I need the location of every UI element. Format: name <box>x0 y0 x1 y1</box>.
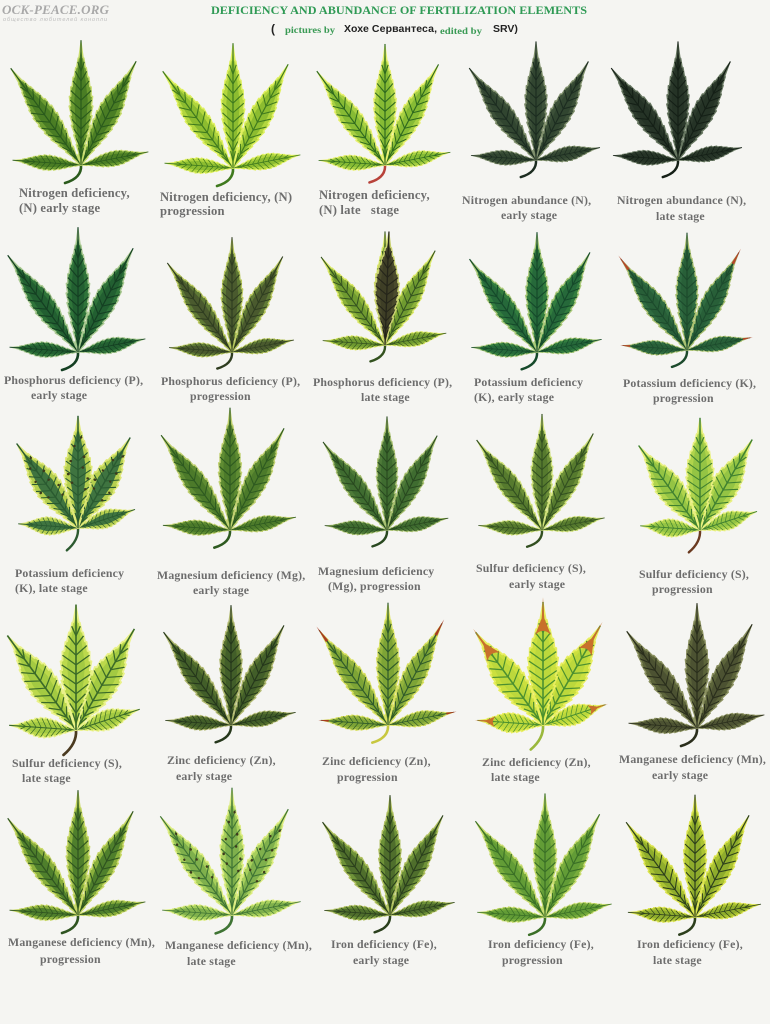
caption: (N) late stage <box>319 203 399 217</box>
icon: leaf <box>308 44 452 182</box>
panel: potassium deficiency progression <box>612 233 756 405</box>
icon: leaf <box>627 418 764 552</box>
caption: Iron deficiency (Fe), <box>331 937 437 951</box>
icon: leaf <box>0 605 148 755</box>
icon: leaf <box>0 790 147 933</box>
caption: progression <box>337 770 398 784</box>
caption: progression <box>652 582 713 596</box>
caption: late stage <box>656 209 705 223</box>
caption: early stage <box>31 388 87 402</box>
caption: Iron deficiency (Fe), <box>637 937 743 951</box>
panel: potassium deficiency late <box>5 416 142 595</box>
caption: Sulfur deficiency (S), <box>12 756 122 770</box>
icon: leaf <box>310 603 457 743</box>
caption: early stage <box>176 769 232 783</box>
subtitle credits <box>271 22 518 37</box>
panel: zinc deficiency late <box>463 597 613 784</box>
caption: Zinc deficiency (Zn), <box>322 754 431 768</box>
caption: early stage <box>353 953 409 967</box>
panel: iron deficiency early <box>314 795 456 967</box>
panel: nitrogen abundance late <box>602 41 746 223</box>
subtitle credits: SRV) <box>493 23 518 35</box>
icon: leaf <box>159 237 295 369</box>
icon: leaf <box>463 597 613 749</box>
icon: leaf <box>617 603 766 746</box>
icon: leaf <box>151 788 302 933</box>
panel: zinc deficiency early <box>155 605 297 783</box>
icon: leaf <box>468 414 606 547</box>
icon: leaf <box>1 40 150 183</box>
icon: leaf <box>314 416 450 546</box>
caption: Potassium deficiency (K), <box>623 376 756 390</box>
caption: early stage <box>652 768 708 782</box>
panel: phosphorus deficiency late <box>312 231 452 404</box>
caption: early stage <box>193 583 249 597</box>
panel: nitrogen deficiency progression <box>153 43 302 218</box>
subtitle credits: ( <box>271 22 275 36</box>
panel: potassium deficiency early <box>461 232 603 404</box>
caption: Iron deficiency (Fe), <box>488 937 594 951</box>
caption: Nitrogen deficiency, (N) <box>160 190 292 204</box>
icon: leaf <box>155 605 297 742</box>
panel: sulfur deficiency late <box>0 605 148 785</box>
icon: leaf <box>617 795 763 935</box>
subtitle credits: pictures by <box>285 26 335 36</box>
caption: Potassium deficiency <box>15 566 124 580</box>
caption: (K), late stage <box>15 581 88 595</box>
caption: late stage <box>653 953 702 967</box>
caption: Manganese deficiency (Mn), <box>619 752 766 766</box>
caption: Zinc deficiency (Zn), <box>167 753 276 767</box>
caption: Phosphorus deficiency (P), <box>313 375 452 389</box>
caption: Manganese deficiency (Mn), <box>165 938 312 952</box>
icon: leaf <box>0 227 147 370</box>
caption: Magnesium deficiency (Mg), <box>157 568 305 582</box>
icon: leaf <box>153 43 302 186</box>
icon: leaf <box>461 232 603 369</box>
caption: Phosphorus deficiency (P), <box>161 374 300 388</box>
caption: Nitrogen abundance (N), <box>462 193 591 207</box>
caption: progression <box>40 952 101 966</box>
caption: (K), early stage <box>474 390 554 404</box>
icon: leaf <box>314 795 456 932</box>
caption: Potassium deficiency <box>474 375 583 389</box>
caption: Sulfur deficiency (S), <box>639 567 749 581</box>
caption: progression <box>502 953 563 967</box>
panel: manganese deficiency late <box>151 788 312 968</box>
caption: Phosphorus deficiency (P), <box>4 373 143 387</box>
caption: Nitrogen abundance (N), <box>617 193 746 207</box>
caption: (Mg), progression <box>328 579 421 593</box>
caption: Sulfur deficiency (S), <box>476 561 586 575</box>
panel: magnesium deficiency early <box>152 408 305 597</box>
icon: leaf <box>312 231 448 361</box>
caption: progression <box>160 204 225 218</box>
subtitle credits: Хохе Сервантеса, <box>344 23 437 35</box>
panel: iron deficiency progression <box>466 793 613 967</box>
panel: sulfur deficiency early <box>468 414 606 591</box>
panel: nitrogen deficiency early <box>1 40 150 215</box>
panel: sulfur deficiency progression <box>627 418 764 596</box>
caption: progression <box>653 391 714 405</box>
caption: Nitrogen deficiency, <box>319 188 430 202</box>
subtitle credits: edited by <box>440 27 482 37</box>
caption: late stage <box>361 390 410 404</box>
panel: magnesium deficiency progression <box>314 416 450 593</box>
panel: phosphorus deficiency early <box>0 227 147 402</box>
caption: Zinc deficiency (Zn), <box>482 755 591 769</box>
caption: late stage <box>187 954 236 968</box>
icon: leaf <box>466 793 613 935</box>
icon: leaf <box>5 416 142 550</box>
logo: OCK-PEACE.ORG <box>2 2 110 17</box>
caption: progression <box>190 389 251 403</box>
panel: phosphorus deficiency progression <box>159 237 300 403</box>
panel: iron deficiency late <box>617 795 763 967</box>
panel: manganese deficiency early <box>617 603 766 782</box>
caption: early stage <box>509 577 565 591</box>
title: DEFICIENCY AND ABUNDANCE OF FERTILIZATION ELEMENTS <box>211 5 587 17</box>
caption: (N) early stage <box>19 201 101 215</box>
icon: leaf <box>460 41 601 177</box>
icon: leaf <box>612 233 753 367</box>
caption: Magnesium deficiency <box>318 564 434 578</box>
caption: Nitrogen deficiency, <box>19 186 130 200</box>
panel: nitrogen abundance early <box>460 41 601 222</box>
panel: manganese deficiency progression <box>0 790 155 966</box>
caption: late stage <box>22 771 71 785</box>
caption: Manganese deficiency (Mn), <box>8 935 155 949</box>
panel: nitrogen deficiency late <box>308 44 452 217</box>
icon: leaf <box>602 41 743 177</box>
caption: early stage <box>501 208 557 222</box>
icon: leaf <box>152 408 298 548</box>
caption: late stage <box>491 770 540 784</box>
logo: общество любителей конопли <box>3 16 107 23</box>
panel: zinc deficiency progression <box>310 603 457 784</box>
